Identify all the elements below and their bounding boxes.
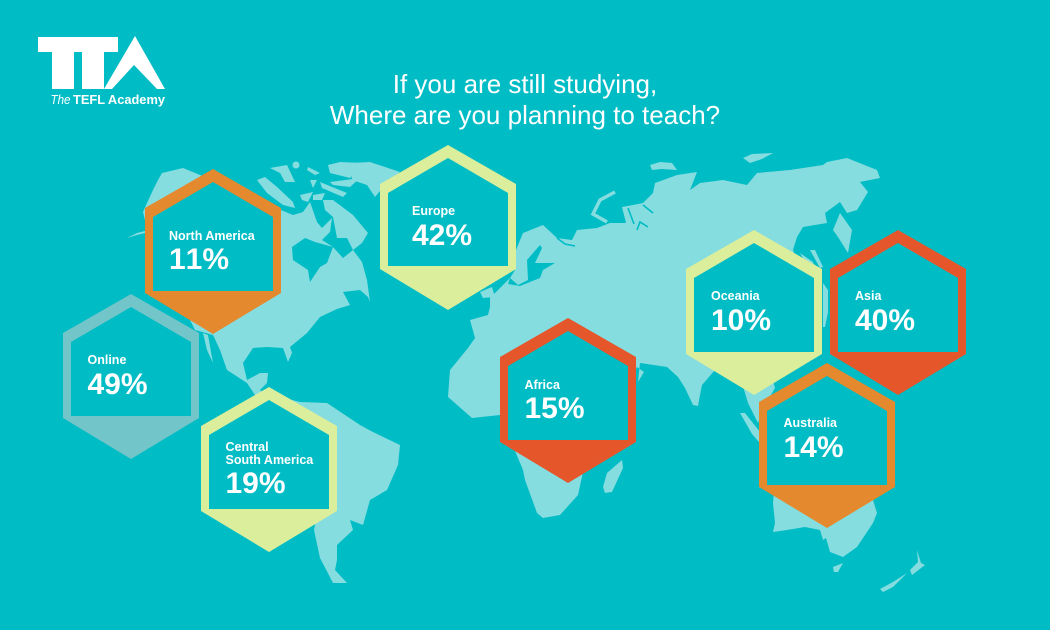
hexagon: Asia: Asia [855, 289, 882, 303]
northern inlets [557, 205, 653, 246]
hexagon: Australia: Australia [784, 416, 838, 430]
hexagon: Europe: Europe [412, 204, 455, 218]
Arctic islands [257, 162, 400, 250]
hexagon: Central South America: South America [226, 453, 314, 467]
hexagon: Online: Online [88, 353, 126, 367]
hexagon: Central South America: Central [226, 440, 269, 454]
world map [127, 153, 925, 592]
hexagon: North America: North America [169, 229, 256, 243]
title: Where are you planning to teach? [330, 100, 720, 130]
Baja California [203, 333, 213, 363]
hexagon: Europe [380, 145, 516, 310]
hexagon: Central South America: 19% [226, 467, 286, 500]
hexagon: Asia: 40% [855, 304, 915, 337]
hexagon: Asia [830, 230, 966, 395]
hexagon: Central South America [201, 387, 337, 552]
Hudson Bay [292, 238, 333, 282]
logo: The TEFL Academy: TEFL Academy [73, 92, 166, 107]
hexagon: Africa: Africa [524, 378, 561, 392]
Eurasia and Africa landmass [448, 158, 880, 518]
hexagon: Online [63, 294, 199, 459]
Novaya Zemlya [593, 192, 615, 222]
hexagon: Oceania: 10% [711, 304, 771, 337]
hexagon: Oceania: Oceania [711, 289, 761, 303]
title: If you are still studying, [393, 69, 657, 99]
hexagon: North America: 11% [169, 243, 229, 276]
hexagon: Europe: 42% [412, 219, 472, 252]
title [330, 69, 720, 130]
hexagon: Online: 49% [88, 368, 148, 401]
New Zealand [880, 550, 925, 592]
hexagon: Africa [500, 318, 636, 483]
arctic and pacific islands [480, 153, 852, 442]
South America landmass [272, 395, 400, 583]
Baltic Sea [508, 245, 555, 286]
hexagon: Australia: 14% [784, 431, 844, 464]
hexagon: Australia [759, 363, 895, 528]
Aleutian line [127, 231, 145, 238]
hexagon: Africa: 15% [524, 392, 585, 425]
hexagon: North America [145, 169, 281, 334]
hexagon: Oceania [686, 230, 822, 395]
logo wordmark: The [50, 92, 70, 107]
logo: The TEFL Academy [38, 36, 166, 107]
Madagascar [603, 460, 623, 493]
North America landmass [143, 168, 370, 402]
Australia landmass [773, 480, 877, 572]
logo mark: TTA [38, 36, 165, 89]
